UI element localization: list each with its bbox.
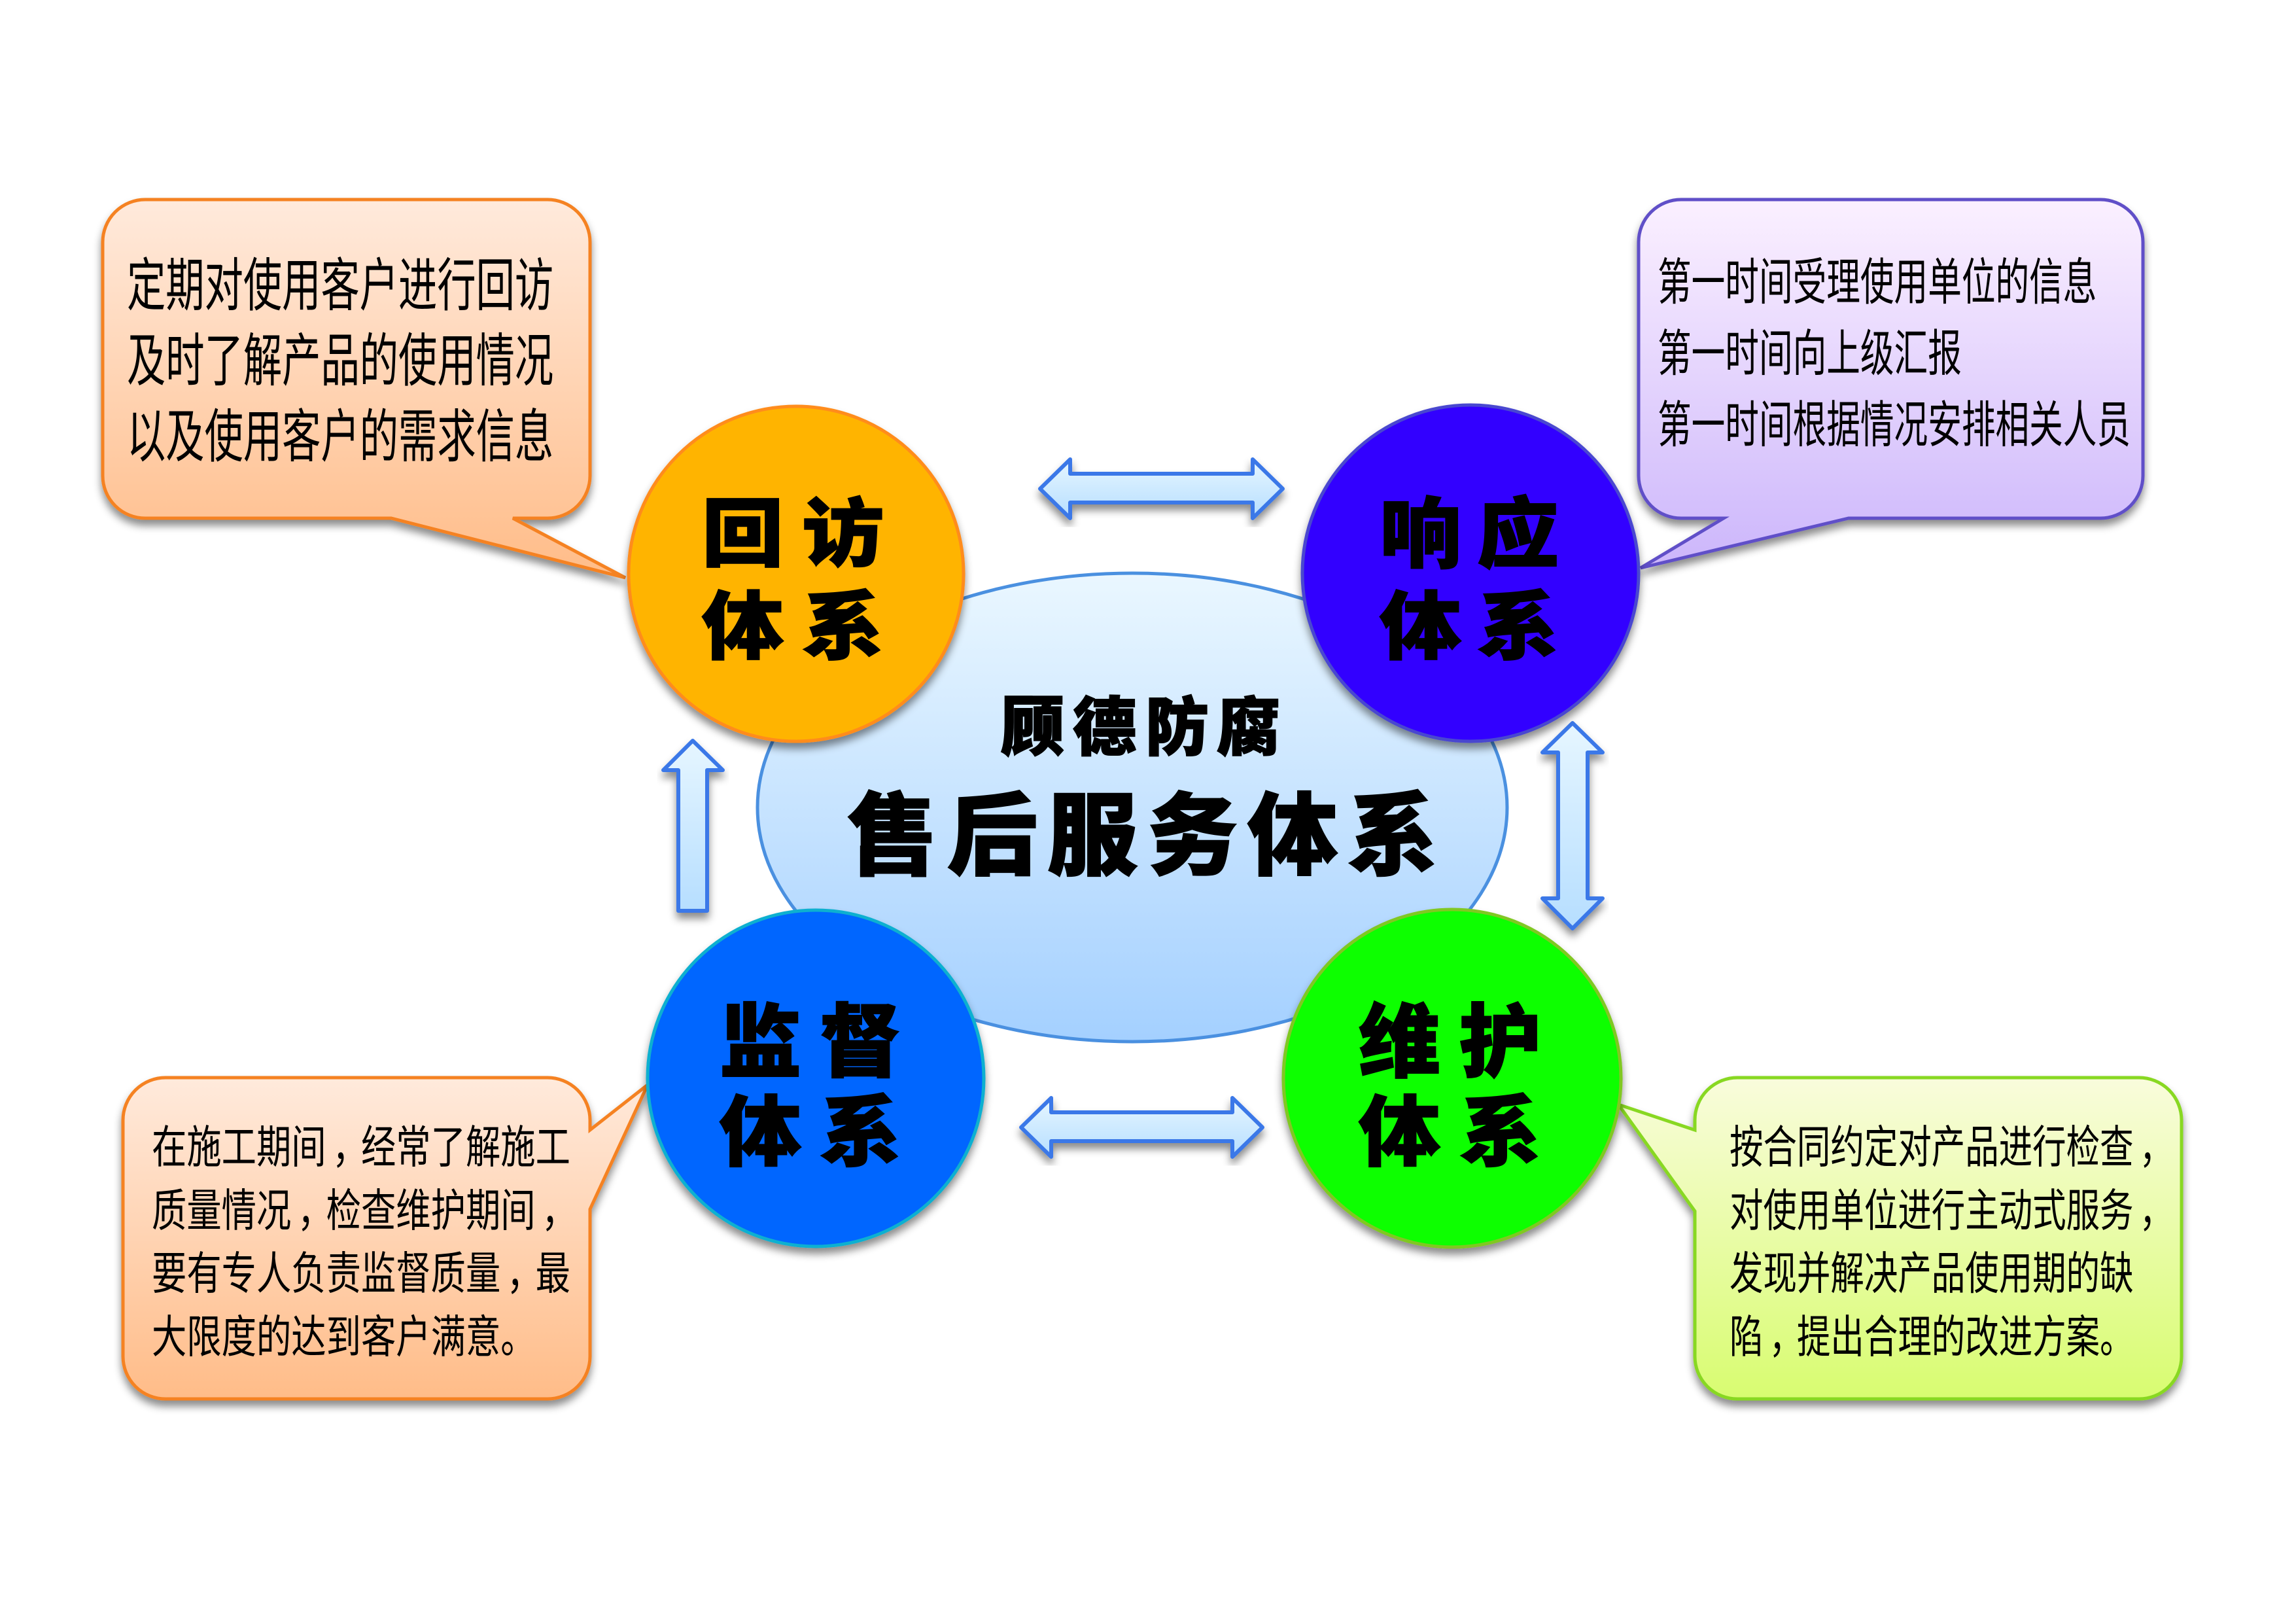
- arrow: left upward: [663, 741, 723, 911]
- text: 质量情况，检查维护期间，: [152, 1186, 576, 1237]
- label: [1380, 491, 1559, 669]
- text: 第一时间根据情况安排相关人员: [1658, 397, 2131, 453]
- label: 回访: [702, 493, 884, 576]
- label: 体系: [720, 1089, 901, 1176]
- node: follow-up system: [629, 406, 964, 741]
- bubble: [1618, 1078, 2182, 1399]
- node: supervision system: [648, 910, 984, 1246]
- text: [127, 253, 553, 469]
- label: 响应: [1380, 491, 1559, 578]
- bubble: [103, 200, 625, 578]
- text: 第一时间受理使用单位的信息: [1658, 255, 2096, 310]
- circle: [1302, 405, 1639, 741]
- callout: supervision: [123, 1078, 648, 1399]
- circle: [629, 406, 964, 741]
- circle: [648, 910, 984, 1246]
- node: response system: [1302, 405, 1639, 741]
- text: 在施工期间，经常了解施工: [152, 1122, 570, 1173]
- text: 以及使用客户的需求信息: [127, 404, 553, 469]
- central ellipse: [757, 573, 1507, 1042]
- text: [1730, 1122, 2173, 1362]
- bubble: [123, 1078, 648, 1399]
- callout: maintenance: [1618, 1078, 2182, 1399]
- label: 体系: [1380, 586, 1559, 669]
- title line: after-sales service system: 售后服务体系: [847, 786, 1438, 887]
- label: 监督: [720, 998, 901, 1088]
- text: [1658, 255, 2131, 453]
- bubble: [1639, 200, 2143, 568]
- text: [152, 1122, 576, 1363]
- label: [720, 998, 901, 1176]
- title: [847, 692, 1438, 887]
- text: 定期对使用客户进行回访: [127, 253, 553, 318]
- text: 要有专人负责监督质量，最: [152, 1248, 570, 1299]
- label: 维护: [1359, 998, 1541, 1088]
- label: 体系: [702, 586, 884, 669]
- label: [1359, 998, 1541, 1176]
- arrow: right double vertical: [1542, 723, 1603, 928]
- text: 按合同约定对产品进行检查，: [1730, 1122, 2173, 1173]
- text: 第一时间向上级汇报: [1658, 326, 1962, 381]
- text: 陷，提出合理的改进方案。: [1730, 1312, 2134, 1362]
- label: [702, 493, 884, 669]
- title line: company name: 顾德防腐: [1001, 692, 1280, 764]
- arrow: bottom double horizontal: [1021, 1098, 1262, 1157]
- label: 体系: [1359, 1089, 1541, 1176]
- node: maintenance system: [1283, 909, 1621, 1247]
- callout: response: [1639, 200, 2143, 568]
- text: 对使用单位进行主动式服务，: [1730, 1186, 2173, 1236]
- text: 发现并解决产品使用期的缺: [1730, 1248, 2134, 1299]
- arrow: top double horizontal: [1040, 459, 1283, 518]
- circle: [1283, 909, 1621, 1247]
- text: 大限度的达到客户满意。: [152, 1312, 536, 1363]
- text: 及时了解产品的使用情况: [127, 328, 553, 393]
- callout: follow-up: [103, 200, 625, 578]
